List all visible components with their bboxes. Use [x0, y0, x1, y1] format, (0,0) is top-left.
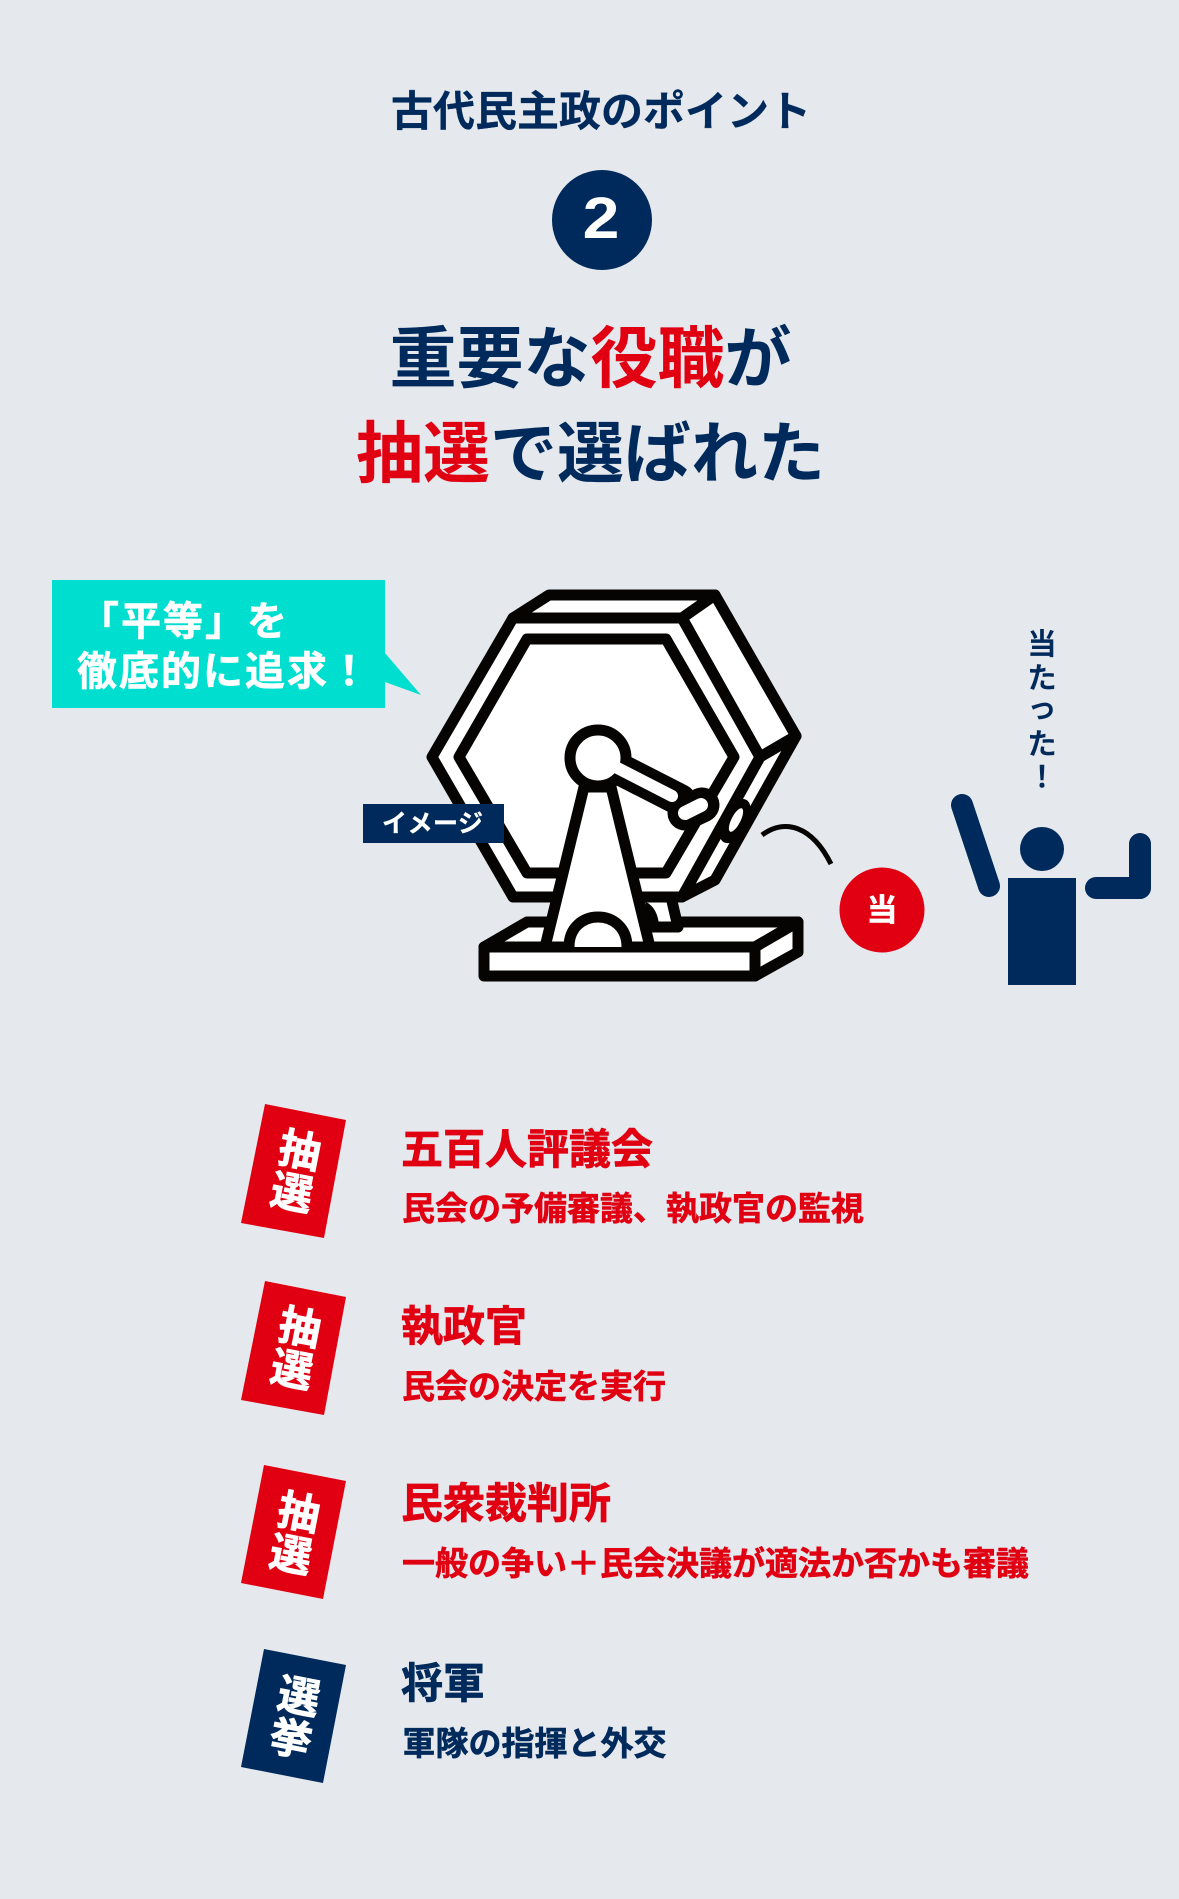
speech text: won: た [1027, 729, 1057, 761]
badge: election: 挙 [266, 1712, 316, 1766]
arrow: ball path arc [762, 827, 831, 864]
row: archon [241, 1281, 666, 1415]
badge: lottery: 選 [266, 1528, 316, 1582]
role description: 民会の予備審議、執政官の監視 [402, 1190, 864, 1227]
speech text: won: っ [1027, 693, 1057, 725]
callout: pursuit of equality: 徹底的に追求！ [77, 650, 371, 694]
tag: image label: イメージ [382, 810, 484, 838]
heading [356, 322, 825, 492]
badge: lottery [241, 1104, 346, 1238]
winning ball [840, 868, 924, 952]
drum front inner hexagon [459, 639, 734, 873]
number badge: 2 [583, 187, 619, 251]
callout: pursuit of equality: 「平等」を [79, 600, 289, 644]
badge: lottery [241, 1281, 346, 1415]
callout: pursuit of equality [52, 580, 421, 708]
speech text: won: ！ [1027, 762, 1057, 794]
title: kicker: 古代民主政のポイント [391, 88, 811, 135]
winning ball: 当 [866, 893, 898, 928]
rear foot [640, 897, 678, 927]
speech text: won [1027, 628, 1057, 794]
row: general [241, 1649, 666, 1783]
crank arm and hub [570, 730, 702, 813]
badge: lottery: 抽 [275, 1301, 325, 1355]
speech text: won: た [1027, 663, 1057, 695]
drum side panels [513, 595, 796, 897]
role description: 一般の争い＋民会決議が適法か否かも審議 [402, 1545, 1029, 1582]
badge: lottery: 選 [267, 1166, 317, 1220]
row: people's court [241, 1465, 1029, 1599]
drum front outer hexagon [432, 618, 760, 897]
role name: 将軍 [401, 1660, 485, 1707]
badge: election [241, 1649, 346, 1783]
badge: election: 選 [274, 1670, 324, 1724]
heading: 抽選で選ばれた [356, 417, 825, 492]
person figure [962, 805, 1140, 985]
badge: lottery: 抽 [274, 1486, 324, 1540]
badge: lottery: 抽 [275, 1124, 325, 1178]
tag: image label [363, 804, 504, 843]
machine base [484, 922, 798, 976]
badge: lottery [241, 1465, 346, 1599]
heading: 重要な役職が [390, 322, 792, 397]
role name: 民衆裁判所 [401, 1480, 611, 1527]
role description: 軍隊の指揮と外交 [402, 1725, 666, 1762]
badge: lottery: 選 [267, 1343, 317, 1397]
row: council of five hundred [241, 1104, 864, 1238]
role name: 執政官 [401, 1303, 527, 1350]
speech text: won: 当 [1027, 628, 1057, 661]
number badge [552, 170, 652, 270]
icon: lottery machine [432, 595, 798, 976]
side wheel [713, 794, 757, 848]
role description: 民会の決定を実行 [402, 1368, 666, 1405]
role name: 五百人評議会 [401, 1126, 653, 1173]
stand [545, 787, 650, 947]
